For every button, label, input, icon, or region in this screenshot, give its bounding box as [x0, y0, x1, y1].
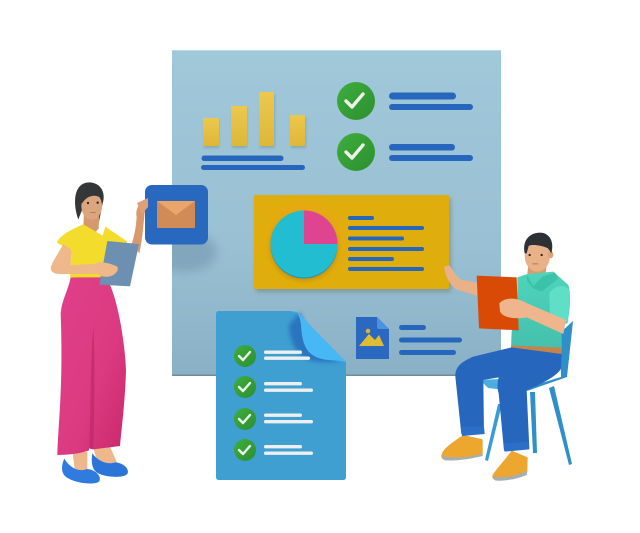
- check badge 1 text lines: [389, 92, 473, 110]
- person: man with orange folder: [441, 233, 570, 481]
- chair: [480, 321, 573, 465]
- checklist row 2: [234, 376, 313, 398]
- person: woman holding tablet: [51, 182, 148, 483]
- orange folder: [477, 276, 519, 330]
- woman yellow shirt: [57, 224, 127, 277]
- man belt: [511, 345, 562, 354]
- man teal shirt: [511, 272, 570, 348]
- man forearm and hand: [499, 299, 566, 334]
- woman fringe: [80, 189, 103, 203]
- woman hair back: [75, 182, 104, 223]
- man eyes and mouth: [528, 254, 543, 264]
- man pointing arm: [444, 265, 480, 297]
- panel: checklist document: [216, 311, 346, 480]
- woman fingers on email tile: [137, 198, 148, 214]
- checklist row 3: [234, 408, 313, 430]
- image file text lines: [399, 325, 462, 355]
- woman eyes and mouth: [87, 201, 99, 213]
- check badge 2 text lines: [389, 144, 473, 161]
- illustration: team reviewing dashboard: [50, 50, 573, 484]
- man face: [525, 240, 550, 272]
- woman pink trousers: [57, 276, 126, 455]
- woman face: [81, 192, 102, 220]
- woman neck: [83, 212, 99, 235]
- man hair: [524, 233, 552, 253]
- man ear: [548, 251, 553, 258]
- card text lines: [348, 216, 424, 271]
- panel: dashboard board: [153, 50, 501, 376]
- checklist row 4: [234, 439, 313, 461]
- tablet: [99, 241, 139, 286]
- icon: email tile: [145, 185, 208, 244]
- man neck: [527, 263, 547, 282]
- checklist row 1: [234, 345, 310, 367]
- man blue trousers: [455, 347, 562, 451]
- man sleeve: [549, 286, 570, 323]
- woman left arm: [51, 244, 102, 274]
- page curl: [289, 311, 346, 362]
- icon: image file: [356, 317, 389, 359]
- woman feet and shoes: [62, 447, 128, 483]
- man collar: [527, 273, 558, 292]
- bar chart: [203, 92, 306, 148]
- check badge 2: [337, 133, 375, 171]
- man trouser cuffs: [461, 427, 529, 452]
- man shoes: [441, 435, 528, 481]
- woman hand on tablet: [93, 262, 118, 277]
- woman raised arm: [132, 198, 148, 253]
- panel: yellow pie chart card: [254, 195, 451, 292]
- check badge 1: [337, 82, 375, 120]
- chart caption lines: [201, 156, 305, 170]
- pie chart: [270, 210, 338, 278]
